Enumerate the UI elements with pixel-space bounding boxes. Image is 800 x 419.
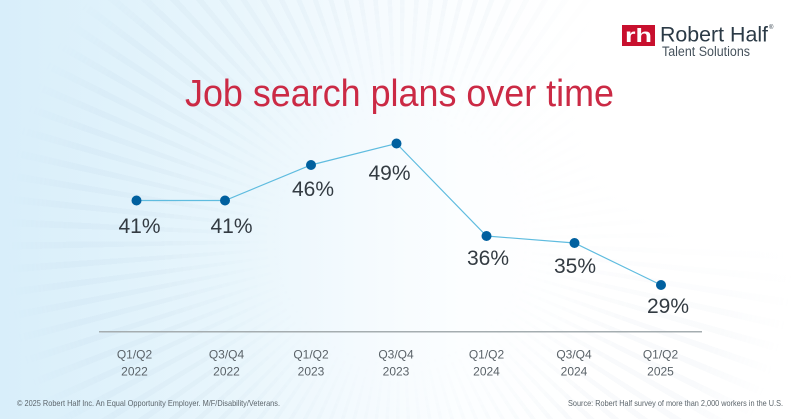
- x axis labels: 2025: [647, 364, 674, 378]
- x axis labels: 2023: [298, 364, 325, 378]
- x axis labels: Q1/Q2: [117, 348, 152, 362]
- x axis labels: 2022: [213, 364, 240, 378]
- logo subtitle: Talent Solutions: [662, 44, 750, 59]
- data labels: [118, 162, 689, 318]
- data labels: 41%: [118, 215, 161, 238]
- title: Job search plans over time: [185, 73, 614, 115]
- data labels: 41%: [210, 215, 253, 238]
- x axis: [99, 331, 702, 332]
- x axis labels: Q1/Q2: [293, 348, 329, 362]
- data labels: 36%: [467, 247, 509, 270]
- x axis labels: Q1/Q2: [469, 348, 504, 362]
- footer copyright: © 2025 Robert Half Inc. An Equal Opportunity Employer. M/F/Disability/Veterans.: [17, 398, 280, 408]
- x axis labels: 2024: [473, 364, 500, 378]
- x axis labels: Q1/Q2: [643, 348, 678, 362]
- line chart: [118, 138, 689, 318]
- x axis labels: Q3/Q4: [209, 348, 244, 362]
- x axis labels: Q3/Q4: [378, 348, 414, 362]
- trend line: [136, 144, 661, 285]
- logo: Robert Half Talent Solutions: [622, 24, 774, 59]
- logo mark: rh: [625, 26, 652, 47]
- data labels: 46%: [292, 178, 334, 201]
- data points: [132, 138, 666, 290]
- x axis labels: 2024: [561, 364, 588, 378]
- x axis labels: [117, 348, 678, 378]
- logo mark: [622, 25, 655, 47]
- data labels: 35%: [554, 255, 596, 278]
- logo wordmark: Robert Half: [660, 24, 768, 46]
- logo registered mark: ®: [769, 24, 774, 31]
- x axis labels: 2022: [121, 364, 148, 378]
- data labels: 49%: [368, 162, 411, 185]
- data labels: 29%: [647, 295, 689, 318]
- x axis labels: 2023: [383, 364, 410, 378]
- x axis labels: Q3/Q4: [556, 348, 592, 362]
